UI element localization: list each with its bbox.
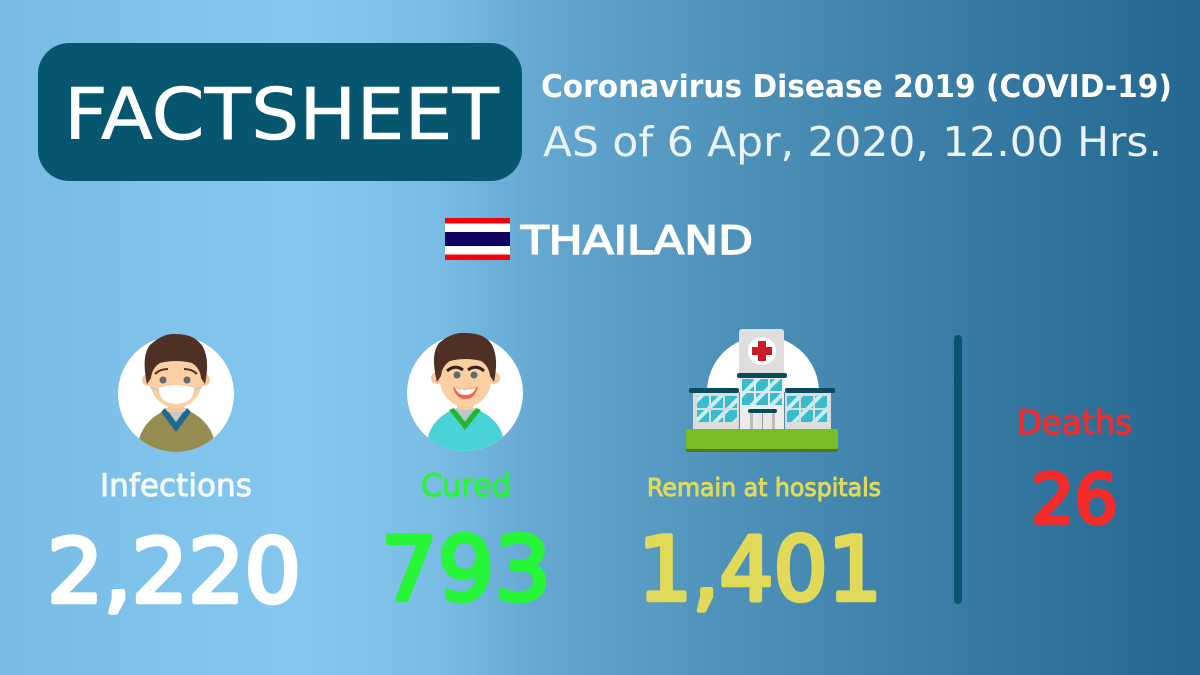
icon: hospital [686,329,838,452]
country heading [445,218,753,264]
factsheet badge [38,43,522,181]
country name: THAILAND [520,219,753,264]
label: Remain at hospitals [647,473,881,502]
badge title: FACTSHEET [64,73,500,156]
stat: cured [386,332,546,604]
number: 26 [1031,460,1118,540]
label: Infections [100,468,252,504]
stat: remain at hospitals [638,329,882,621]
date line: AS of 6 Apr, 2020, 12.00 Hrs. [543,118,1162,166]
stat: infections [47,334,301,623]
number: 793 [381,518,551,621]
header text [541,69,1172,166]
icon: Thai flag [445,218,510,260]
disease title: Coronavirus Disease 2019 (COVID-19) [541,69,1172,105]
icon: masked person [118,334,234,460]
label: Cured [421,468,511,504]
number: 1,401 [638,518,882,621]
label: Deaths [1017,403,1132,443]
stat: deaths [1017,403,1132,540]
number: 2,220 [47,520,301,623]
icon: smiling person [407,333,523,460]
